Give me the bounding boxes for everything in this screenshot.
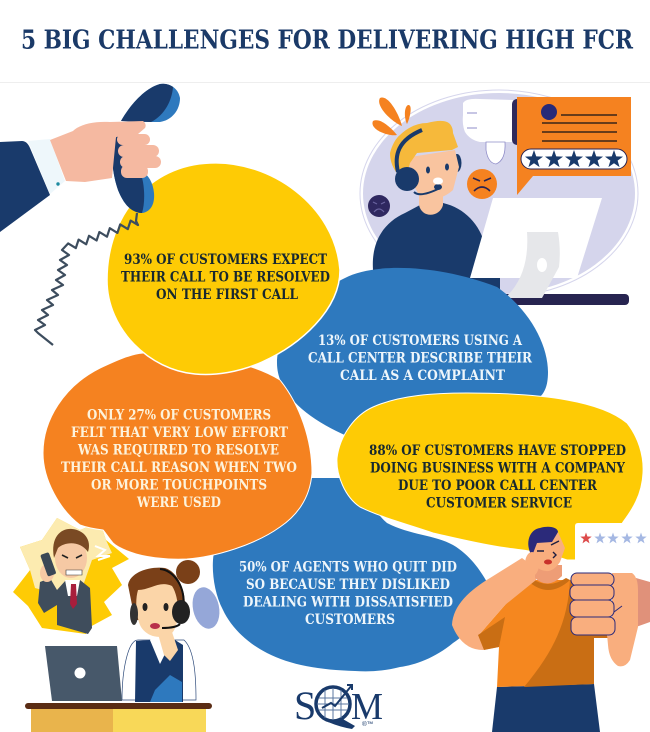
man shirt and tie: [65, 580, 80, 596]
sleeve shade: [478, 617, 505, 650]
yellow burst: [13, 518, 129, 634]
logo: SQM: S: [294, 683, 316, 728]
trousers: [492, 684, 600, 732]
woman headset: [160, 569, 183, 605]
panel: 50% agents blue blob: 50% OF AGENTS WHO QUIT DID: [239, 560, 457, 576]
panel: 50% agents blue blob: CUSTOMERS: [305, 612, 395, 628]
desk bar: [500, 294, 629, 305]
agent neck: [419, 190, 443, 215]
agent eyes and mouth: [426, 166, 430, 174]
phone cord: [35, 213, 138, 345]
woman hand: [158, 632, 178, 661]
illustration: man giving thumbs down: [452, 523, 650, 732]
man hair: [528, 527, 558, 556]
illustration: hand holding telephone: [0, 84, 180, 345]
lightning mark: [95, 546, 110, 560]
angry emoji orange: [467, 169, 497, 199]
man head: [533, 532, 565, 571]
man neck: [535, 565, 562, 584]
agent face: [410, 150, 459, 198]
panel: 88% stopped business yellow blob: [337, 393, 643, 560]
lavender backdrop: [363, 93, 635, 294]
panel: 27% low effort orange blob: OR MORE TOUCHPOINTS: [91, 478, 267, 494]
sad emoji dark: [368, 195, 390, 217]
woman collar and neck: [150, 632, 172, 664]
panel: 88% stopped business yellow blob: CUSTOMER SERVICE: [426, 496, 572, 512]
panel: 13% complaint blue blob: 13% OF CUSTOMERS USING A: [318, 333, 522, 349]
oval accent: [189, 585, 223, 631]
thumbs down hand: [463, 99, 529, 164]
logo: SQM: M: [351, 686, 383, 728]
logo globe: [316, 685, 355, 729]
woman vest: [135, 640, 183, 702]
panel: 93% expect first call yellow blob: [107, 163, 340, 374]
hand: [50, 121, 161, 182]
panel: 93% expect first call yellow blob: ON THE FIRST CALL: [156, 287, 298, 303]
laptop: [45, 646, 122, 701]
outer ring: [360, 90, 638, 297]
agent right ear cup: [452, 154, 462, 172]
shirt cuff: [28, 139, 65, 194]
orange shirt: [478, 580, 594, 687]
woman sleeves: [122, 640, 196, 700]
panel: 27% low effort orange blob: THEIR CALL REASON WHEN TWO: [61, 460, 297, 476]
star rating pill: [521, 149, 627, 169]
arm sleeve: [0, 141, 50, 232]
panel: 27% low effort orange blob: WAS REQUIRED TO RESOLVE: [77, 442, 279, 458]
angry man suit: [38, 578, 92, 634]
orange review panel: [517, 97, 631, 195]
desk: [25, 703, 212, 732]
thumbs down fist: [570, 573, 638, 666]
orange splash marks: [372, 97, 411, 135]
panel: 13% complaint blue blob: [277, 268, 548, 436]
panel: 50% agents blue blob: DEALING WITH DISSATISFIED: [243, 594, 453, 610]
woman hair bun: [176, 560, 200, 584]
panel: 88% stopped business yellow blob: DUE TO POOR CALL CENTER: [398, 478, 598, 494]
man hand on cheek: [525, 552, 539, 576]
panel: 27% low effort orange blob: ONLY 27% OF CUSTOMERS: [87, 408, 271, 424]
agent body: [373, 203, 500, 290]
panel: 93% expect first call yellow blob: THEIR CALL TO BE RESOLVED: [121, 270, 330, 286]
panel: 50% agents blue blob: [213, 478, 487, 671]
agent hair: [390, 121, 458, 177]
panel: 13% complaint blue blob: CALL CENTER DESCRIBE THEIR: [308, 350, 533, 366]
illustration: frustrated call center agent: [360, 90, 638, 305]
illustration: angry caller and stressed agent: [13, 518, 223, 732]
logo: SQM: [294, 683, 383, 729]
logo: SQM: ®™: [362, 720, 373, 728]
panel: 93% expect first call yellow blob: 93% OF CUSTOMERS EXPECT: [124, 252, 327, 268]
phone handset: [112, 84, 180, 213]
headset: [397, 130, 422, 172]
angry man head: [55, 538, 87, 578]
man phone and hand: [40, 564, 54, 582]
computer monitor: [470, 198, 602, 298]
panel: 27% low effort orange blob: [43, 352, 312, 559]
man face details: [537, 541, 559, 558]
panel: 27% low effort orange blob: FELT THAT VERY LOW EFFORT: [71, 425, 288, 441]
panel: 50% agents blue blob: SO BECAUSE THEY DISLIKED: [246, 577, 450, 593]
rating card: [575, 523, 650, 600]
raised arm: [452, 558, 538, 650]
woman face: [136, 584, 178, 637]
panel: 13% complaint blue blob: CALL AS A COMPLAINT: [340, 368, 505, 384]
forearm: [636, 578, 650, 627]
panel: 27% low effort orange blob: WERE USED: [136, 495, 221, 511]
